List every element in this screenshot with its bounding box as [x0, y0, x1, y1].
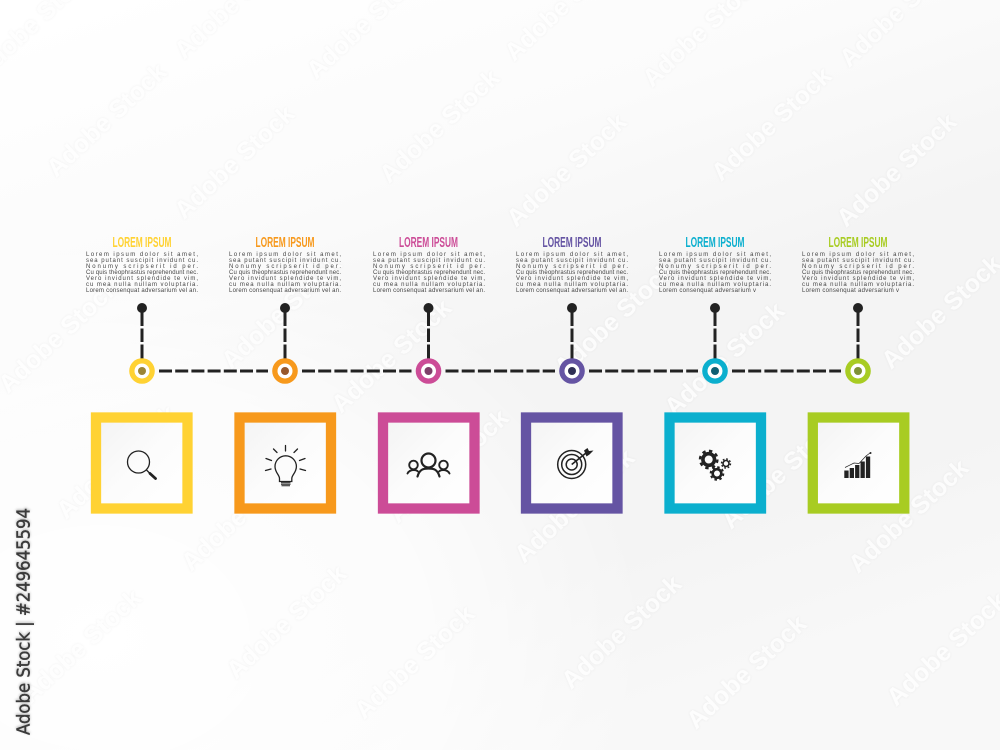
- text block 4: Lorem ipsum dolor sit amet,: [516, 252, 628, 258]
- text block 2: sea putant suscipit invidunt cu.: [229, 258, 341, 264]
- watermark pattern: Adobe Stock: [326, 294, 457, 418]
- icon card 5: [670, 418, 761, 508]
- heading 2: LOREM IPSUM: [256, 235, 314, 251]
- text block 3: [373, 252, 485, 294]
- watermark pattern: Adobe Stock: [706, 62, 837, 186]
- text block 6: Lorem consenquat adversarium v: [802, 288, 899, 294]
- text block 5: Lorem ipsum dolor sit amet,: [659, 252, 771, 258]
- icon: gears: [700, 451, 730, 480]
- step 5: settings: [659, 235, 771, 508]
- connector pin 6: [853, 303, 863, 360]
- watermark pattern: Adobe Stock: [374, 64, 505, 188]
- text block 6: Nonumy scripserit id per.: [802, 264, 914, 270]
- text block 6: Vero invidunt splendide te vim,: [802, 276, 914, 282]
- text block 1: [86, 252, 198, 294]
- text block 2: Lorem consenquat adversarium vel an.: [229, 288, 341, 294]
- step 6: growth: [802, 235, 914, 508]
- vertical stock id caption: Adobe Stock | #249645594: [14, 508, 34, 735]
- icon: rising bar chart: [844, 452, 872, 478]
- text block 3: sea putant suscipit invidunt cu.: [373, 258, 485, 264]
- watermark pattern: Adobe Stock: [169, 100, 300, 224]
- heading 3: LOREM IPSUM: [399, 235, 458, 251]
- text block 4: Vero invidunt splendide te vim,: [516, 276, 628, 282]
- text block 6: Cu quis theophrastus reprehendunt nec.: [802, 270, 914, 276]
- timeline node 4: [559, 358, 585, 384]
- icon card 2: [240, 418, 331, 508]
- connector pin 1: [137, 303, 147, 360]
- icon card 6: [813, 418, 904, 508]
- text block 3: Lorem ipsum dolor sit amet,: [373, 252, 485, 258]
- watermark pattern: Adobe Stock: [549, 257, 680, 381]
- step 1: research: [86, 235, 198, 508]
- text block 1: Lorem consenquat adversarium vel an.: [86, 288, 198, 294]
- text block 1: Cu quis theophrastus reprehendunt nec.: [86, 270, 198, 276]
- icon card 4: [526, 418, 618, 508]
- horizontal dashed timeline: [159, 370, 841, 372]
- text block 5: Cu quis theophrastus reprehendunt nec.: [659, 270, 771, 276]
- text block 3: Nonumy scripserit id per.: [373, 264, 485, 270]
- text block 6: [802, 252, 914, 294]
- watermark pattern: Adobe Stock: [51, 400, 182, 524]
- text block 5: [659, 252, 771, 294]
- icon card 1: [96, 418, 188, 508]
- watermark pattern: Adobe Stock: [681, 610, 812, 734]
- watermark pattern: Adobe Stock: [509, 444, 640, 568]
- watermark pattern: Adobe Stock: [659, 297, 790, 421]
- connector pin 4: [567, 303, 577, 360]
- watermark pattern: Adobe Stock: [16, 584, 147, 708]
- timeline node 5: [702, 358, 728, 384]
- text block 1: Nonumy scripserit id per.: [86, 264, 198, 270]
- text block 4: cu mea nulla nullam voluptaria.: [516, 282, 628, 288]
- timeline node 2: [272, 358, 298, 384]
- text block 3: Vero invidunt splendide te vim,: [373, 276, 485, 282]
- text block 2: Lorem ipsum dolor sit amet,: [229, 252, 341, 258]
- text block 5: Lorem consenquat adversarium v: [659, 288, 756, 294]
- text block 4: [516, 252, 628, 294]
- step 4: target: [516, 235, 628, 508]
- text block 2: cu mea nulla nullam voluptaria.: [229, 282, 341, 288]
- watermark pattern: Adobe Stock: [501, 108, 632, 232]
- text block 2: Nonumy scripserit id per.: [229, 264, 341, 270]
- timeline node 3: [416, 358, 441, 384]
- text block 4: sea putant suscipit invidunt cu.: [516, 258, 628, 264]
- icon: group of people: [408, 454, 450, 476]
- text block 4: Nonumy scripserit id per.: [516, 264, 628, 270]
- heading 1: LOREM IPSUM: [112, 235, 172, 251]
- icon card 3: [383, 418, 474, 508]
- text block 3: Lorem consenquat adversarium vel an.: [373, 288, 485, 294]
- text block 3: Cu quis theophrastus reprehendunt nec.: [373, 270, 485, 276]
- connector pin 3: [424, 303, 434, 360]
- heading 6: LOREM IPSUM: [828, 235, 888, 251]
- text block 2: Vero invidunt splendide te vim,: [229, 276, 341, 282]
- watermark pattern: Adobe Stock: [556, 570, 687, 694]
- text block 1: sea putant suscipit invidunt cu.: [86, 258, 198, 264]
- text block 6: sea putant suscipit invidunt cu.: [802, 258, 914, 264]
- watermark pattern: Adobe Stock: [216, 250, 347, 374]
- icon: light bulb: [266, 446, 306, 486]
- icon: target with arrow: [558, 448, 594, 478]
- text block 1: Lorem ipsum dolor sit amet,: [86, 252, 198, 258]
- connector pin 5: [710, 303, 720, 360]
- text block 6: cu mea nulla nullam voluptaria.: [802, 282, 914, 288]
- connector pin 2: [280, 303, 290, 360]
- text block 4: Lorem consenquat adversarium vel an.: [516, 288, 628, 294]
- text block 2: Cu quis theophrastus reprehendunt nec.: [229, 270, 341, 276]
- watermark pattern: Adobe Stock: [176, 452, 307, 576]
- text block 5: sea putant suscipit invidunt cu.: [659, 258, 771, 264]
- text block 2: [229, 252, 341, 294]
- heading 5: LOREM IPSUM: [686, 235, 744, 251]
- text block 4: Cu quis theophrastus reprehendunt nec.: [516, 270, 628, 276]
- watermark pattern: Adobe Stock: [831, 108, 962, 232]
- icon: magnifying glass: [128, 451, 156, 478]
- watermark pattern: Adobe Stock: [349, 600, 480, 724]
- watermark pattern: Adobe Stock: [383, 404, 514, 528]
- text block 5: Nonumy scripserit id per.: [659, 264, 771, 270]
- text block 3: cu mea nulla nullam voluptaria.: [373, 282, 485, 288]
- text block 5: cu mea nulla nullam voluptaria.: [659, 282, 771, 288]
- text block 5: Vero invidunt splendide te vim,: [659, 276, 771, 282]
- watermark pattern: Adobe Stock: [716, 410, 847, 534]
- step 2: idea: [229, 235, 341, 508]
- text block 1: Vero invidunt splendide te vim,: [86, 276, 198, 282]
- text block 6: Lorem ipsum dolor sit amet,: [802, 252, 914, 258]
- step 3: team: [373, 235, 485, 508]
- watermark pattern: Adobe Stock: [221, 560, 352, 684]
- timeline node 6: [845, 358, 871, 384]
- timeline node 1: [129, 358, 155, 384]
- heading 4: LOREM IPSUM: [542, 235, 602, 251]
- watermark pattern: Adobe Stock: [41, 58, 172, 182]
- watermark pattern: Adobe Stock: [843, 454, 974, 578]
- text block 1: cu mea nulla nullam voluptaria.: [86, 282, 198, 288]
